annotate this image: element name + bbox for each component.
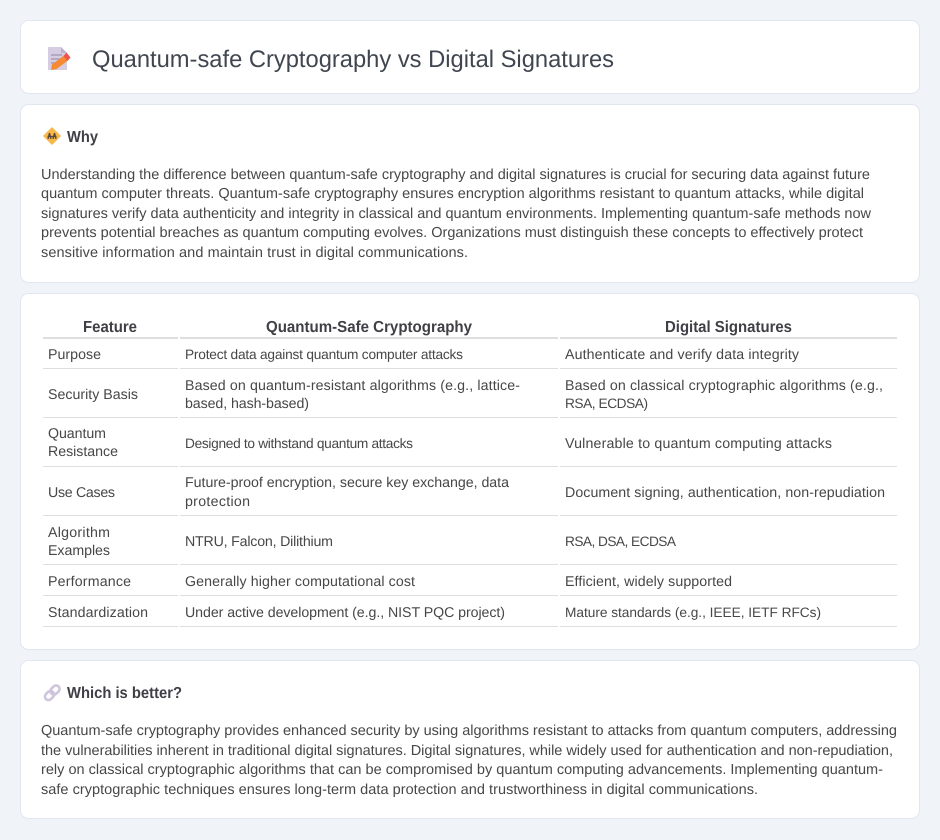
row: algorithm examples: Examples bbox=[48, 543, 110, 559]
row: algorithm examples: NTRU, Falcon, Dilithium bbox=[185, 534, 333, 550]
panel: comparison table bbox=[20, 294, 920, 650]
row: purpose: Authenticate and verify data integrity bbox=[565, 347, 800, 363]
title: Quantum-safe Cryptography vs Digital Signatures bbox=[92, 46, 614, 73]
heading: why: Why bbox=[67, 129, 98, 146]
row: quantum resistance: Vulnerable to quantum computing attacks bbox=[565, 436, 832, 452]
row: purpose: Purpose bbox=[48, 347, 101, 363]
table header row: Digital Signatures bbox=[665, 319, 792, 336]
table header row: Feature bbox=[83, 319, 137, 336]
row: security basis: RSA, ECDSA) bbox=[565, 396, 648, 411]
row: quantum resistance: Quantum bbox=[48, 426, 106, 442]
text block: which is better paragraph: rely on classical cryptographic algorithms that can be compromised by quantum computing advancements. Implementing quantum- bbox=[41, 762, 883, 778]
row: purpose: Protect data against quantum computer attacks bbox=[185, 347, 463, 362]
row: use cases: Document signing, authentication, non-repudiation bbox=[565, 485, 885, 501]
text block: why paragraph: Understanding the difference between quantum-safe cryptography and digital signatures is crucial for securing data against future bbox=[41, 167, 870, 183]
row: standardization: Under active development (e.g., NIST PQC project) bbox=[185, 605, 505, 621]
row: standardization bbox=[48, 605, 821, 621]
row: purpose bbox=[48, 347, 800, 363]
row: performance: Performance bbox=[48, 574, 131, 590]
row: use cases: Future-proof encryption, secure key exchange, data bbox=[185, 475, 509, 491]
text block: which is better paragraph bbox=[41, 723, 897, 798]
panel: which is better bbox=[20, 660, 920, 818]
row: quantum resistance bbox=[48, 426, 832, 460]
row: standardization: Mature standards (e.g., IEEE, IETF RFCs) bbox=[565, 605, 821, 620]
panel: why bbox=[20, 104, 920, 282]
text block: why paragraph: quantum computer threats. Quantum-safe cryptography ensures encryption algorithms resistant to quantum attacks, while digital bbox=[41, 186, 864, 202]
icon: document with pencil bbox=[48, 47, 70, 70]
row: quantum resistance: Resistance bbox=[48, 444, 118, 460]
text block: why paragraph bbox=[41, 167, 872, 261]
row: performance: Efficient, widely supported bbox=[565, 574, 732, 590]
row: security basis: Security Basis bbox=[48, 387, 138, 403]
icon: construction diamond bbox=[44, 128, 60, 144]
row: security basis bbox=[48, 378, 883, 412]
table header row bbox=[83, 319, 792, 336]
row: use cases bbox=[48, 475, 885, 510]
row: security basis: based, hash-based) bbox=[185, 396, 309, 412]
text block: which is better paragraph: the vulnerabilities inherent in traditional digital signatures. Digital signatures, while widely used for authentication and non-repudiation, bbox=[41, 743, 893, 759]
row: security basis: Based on quantum-resistant algorithms (e.g., lattice- bbox=[185, 378, 520, 394]
row: performance: Generally higher computational cost bbox=[185, 574, 415, 590]
table header row: Quantum-Safe Cryptography bbox=[266, 319, 472, 336]
row: quantum resistance: Designed to withstand quantum attacks bbox=[185, 436, 413, 451]
heading: which is better: Which is better? bbox=[67, 685, 182, 702]
panel: title card bbox=[20, 20, 920, 94]
text block: which is better paragraph: safe cryptographic techniques ensures long-term data protection and trustworthiness in digital communications. bbox=[41, 782, 758, 798]
row: performance bbox=[48, 574, 732, 590]
row: security basis: Based on classical cryptographic algorithms (e.g., bbox=[565, 378, 883, 394]
row: use cases: protection bbox=[185, 494, 250, 510]
icon: chain link bbox=[43, 684, 61, 702]
row: algorithm examples bbox=[48, 525, 677, 559]
text block: why paragraph: sensitive information and maintain trust in digital communications. bbox=[41, 245, 468, 261]
row: algorithm examples: RSA, DSA, ECDSA bbox=[565, 534, 677, 549]
text block: why paragraph: signatures verify data authenticity and integrity in classical and quantum environments. Implementing quantum-safe methods now bbox=[41, 206, 872, 222]
row: algorithm examples: Algorithm bbox=[48, 525, 110, 541]
text block: which is better paragraph: Quantum-safe cryptography provides enhanced security by using algorithms resistant to attacks from quantum computers, addressing bbox=[41, 723, 897, 739]
text block: why paragraph: prevents potential breaches as quantum computing evolves. Organizations must distinguish these concepts to effectively protect bbox=[41, 225, 863, 241]
row: use cases: Use Cases bbox=[48, 485, 115, 501]
row: standardization: Standardization bbox=[48, 605, 148, 621]
